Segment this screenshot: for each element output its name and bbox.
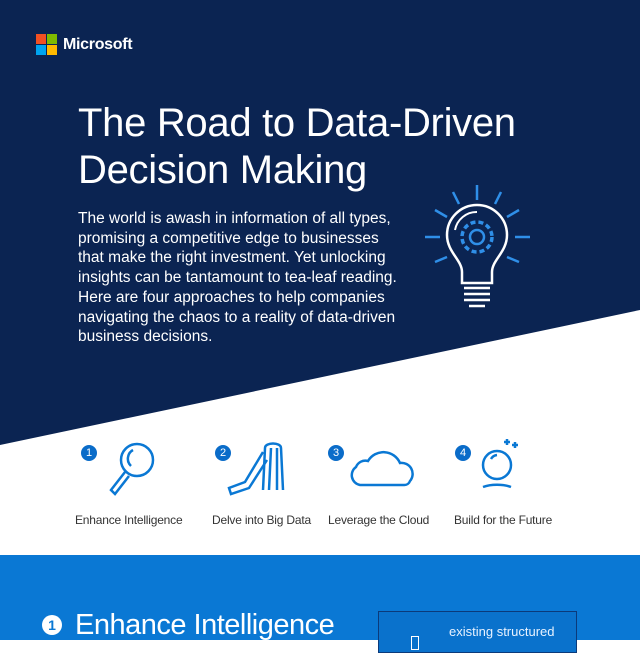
approach 4: 4 [460, 447, 466, 459]
intro text: that make the right investment. Yet unlocking [78, 249, 386, 266]
approach 4: Build for the Future [454, 513, 552, 527]
callout box: existing structured [449, 624, 554, 639]
approach 2: 2 [220, 447, 226, 459]
approach 2 [212, 442, 312, 527]
four approaches row [75, 439, 552, 527]
logo: Microsoft [36, 34, 132, 55]
title: Decision Making [78, 148, 367, 192]
intro text: insights can be tantamount to tea-leaf reading. [78, 269, 397, 286]
title [78, 101, 516, 192]
intro text: Here are four approaches to help companies [78, 289, 385, 306]
section heading: Enhance Intelligence: Enhance Intelligence [75, 609, 334, 641]
approach 2: Delve into Big Data [212, 513, 311, 527]
approach 3: Leverage the Cloud [328, 513, 429, 527]
intro text: navigating the chaos to a reality of data-driven [78, 309, 395, 326]
intro text [78, 210, 397, 345]
approach 3 [328, 445, 429, 527]
approach 3: 3 [333, 447, 339, 459]
intro text: promising a competitive edge to businesses [78, 230, 379, 247]
intro text: The world is awash in information of all types, [78, 210, 391, 227]
logo: Microsoft: Microsoft [63, 36, 132, 53]
title: The Road to Data-Driven [78, 101, 516, 145]
approach 1 [75, 442, 182, 527]
approach 4 [454, 439, 552, 527]
blue section [0, 555, 640, 640]
callout box [378, 611, 577, 653]
section heading: Enhance Intelligence: 1 [48, 617, 56, 633]
approach 1: 1 [86, 447, 92, 459]
icon: lightbulb [425, 185, 530, 308]
intro text: business decisions. [78, 328, 212, 345]
approach 1: Enhance Intelligence [75, 513, 182, 527]
